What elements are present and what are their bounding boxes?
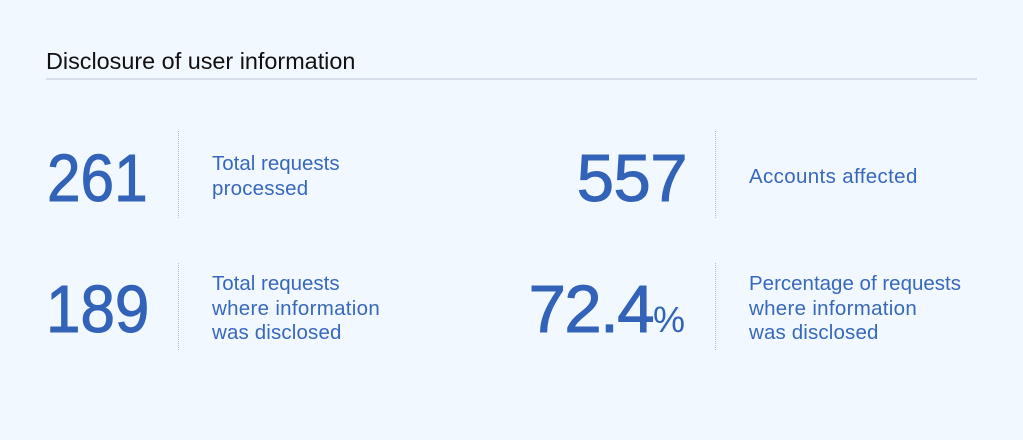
- stat: requests with disclosure: [46, 263, 380, 350]
- divider: [178, 263, 179, 350]
- stat: accounts affected: [577, 131, 918, 218]
- title: Disclosure of user information: [46, 48, 355, 74]
- label: percentage of requests where information was disclosed: was disclosed: [749, 321, 879, 344]
- title rule: [46, 78, 977, 80]
- number: 557: 557: [577, 141, 687, 216]
- label: total requests processed: processed: [212, 176, 308, 200]
- label: total requests where information was disclosed: was disclosed: [212, 321, 342, 344]
- label: percentage of requests where information was disclosed: where information: [749, 296, 917, 320]
- number: 261: 261: [47, 141, 148, 216]
- label: total requests processed: [212, 152, 340, 200]
- label: total requests where information was disclosed: where information: [212, 296, 380, 320]
- number: 72.4%: 72.4%: [529, 272, 685, 347]
- stat: percentage disclosed: [529, 263, 961, 350]
- label: total requests processed: Total requests: [212, 152, 340, 175]
- label: total requests where information was disclosed: [212, 272, 380, 344]
- number: 189: 189: [46, 272, 149, 347]
- label: percentage of requests where information was disclosed: [749, 272, 961, 344]
- label: percentage of requests where information was disclosed: Percentage of requests: [749, 272, 961, 295]
- divider: [715, 263, 716, 350]
- divider: [715, 131, 716, 218]
- label: total requests where information was disclosed: Total requests: [212, 272, 340, 295]
- label: accounts affected: Accounts affected: [749, 165, 918, 188]
- stat: total requests processed: [47, 131, 340, 218]
- divider: [178, 131, 179, 218]
